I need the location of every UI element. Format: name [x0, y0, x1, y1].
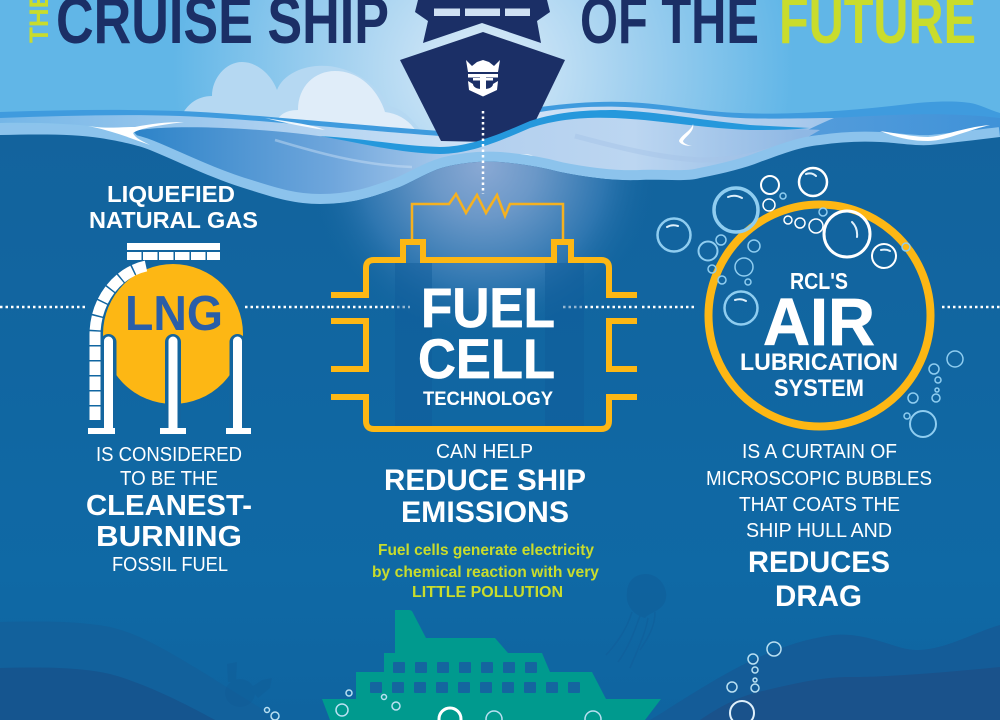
- left light band: [0, 123, 170, 160]
- text: air lubrication description: REDUCES: [748, 546, 890, 579]
- text: LNG description: BURNING: [96, 521, 242, 553]
- heading: RCL's air lubrication system: RCL'S: [790, 268, 848, 294]
- panel: air lubrication: [658, 168, 963, 613]
- text: fuel cell description: CAN HELP: [436, 441, 533, 463]
- callout: little pollution: by chemical reaction with very: [372, 564, 599, 581]
- heading: RCL's air lubrication system: AIR: [763, 285, 875, 360]
- heading: liquefied natural gas: NATURAL GAS: [89, 207, 258, 233]
- bottom sea hills: [0, 622, 1000, 720]
- ship: [400, 0, 565, 142]
- text: LNG description: TO BE THE: [120, 468, 218, 490]
- ship hull: [400, 32, 565, 142]
- text: air lubrication description: DRAG: [775, 580, 862, 613]
- text: air lubrication description: THAT COATS THE: [739, 494, 900, 516]
- center underwater glow: [336, 162, 632, 312]
- ship windows: [434, 8, 530, 16]
- text: fuel cell description: [384, 441, 586, 529]
- dotted vertical line: [482, 111, 484, 194]
- icon: crown and anchor logo: [466, 60, 500, 96]
- icon: green ship: [322, 610, 661, 720]
- front wave body: [133, 116, 820, 210]
- heading: liquefied natural gas: LIQUEFIED: [107, 181, 235, 207]
- heading: fuel cell technology: [418, 276, 555, 410]
- heading: fuel cell technology: CELL: [418, 327, 555, 390]
- icon: crab: [225, 662, 272, 707]
- wave ribbons: [275, 136, 770, 167]
- heading: RCL's air lubrication system: SYSTEM: [774, 375, 864, 402]
- panel: fuel cell: [331, 194, 637, 601]
- text: LNG description: IS CONSIDERED: [96, 444, 242, 466]
- pale wave layer: [0, 107, 1000, 210]
- light wave edge band: [0, 134, 1000, 204]
- ship windows: [370, 662, 580, 693]
- callout: little pollution: [372, 542, 599, 601]
- heading: fuel cell technology: FUEL: [421, 276, 555, 339]
- heading: fuel cell technology: TECHNOLOGY: [423, 389, 553, 410]
- heading: RCL's air lubrication system: LUBRICATION: [740, 349, 898, 376]
- heading: liquefied natural gas: [89, 181, 258, 233]
- icon: LNG tank: [88, 243, 251, 434]
- icon: fuel cell diagram: [331, 194, 637, 429]
- sky background: [0, 0, 1000, 210]
- ship bridge: [415, 0, 550, 43]
- text: air lubrication description: MICROSCOPIC BUBBLES: [706, 468, 932, 490]
- icon: LNG tank: LNG: [125, 287, 223, 341]
- icon: ring: [708, 204, 930, 426]
- heading: RCL's air lubrication system: [740, 268, 898, 402]
- text: LNG description: CLEANEST-: [86, 490, 252, 522]
- bubbles: right cluster: [904, 351, 963, 437]
- text: fuel cell description: EMISSIONS: [401, 496, 569, 529]
- white foam: [88, 118, 990, 146]
- bubbles: bottom: [264, 642, 781, 720]
- icon: jellyfish: [606, 574, 666, 668]
- clouds: [178, 62, 424, 135]
- dotted horizontal line: [0, 306, 1000, 308]
- text: air lubrication description: IS A CURTAIN OF: [742, 441, 897, 463]
- callout: little pollution: LITTLE POLLUTION: [412, 584, 563, 601]
- panel: LNG: [86, 181, 258, 576]
- text: LNG description: [86, 444, 252, 576]
- callout: little pollution: Fuel cells generate electricity: [378, 542, 594, 559]
- blue wave stripe: [320, 110, 810, 154]
- back wave: [0, 101, 1000, 210]
- bubbles: upper cluster: [658, 168, 910, 324]
- right wave body: [735, 114, 1000, 172]
- text: air lubrication description: [706, 441, 932, 613]
- title: [24, 0, 976, 57]
- text: LNG description: FOSSIL FUEL: [112, 554, 228, 576]
- text: air lubrication description: SHIP HULL AND: [746, 520, 892, 542]
- text: fuel cell description: REDUCE SHIP: [384, 464, 586, 497]
